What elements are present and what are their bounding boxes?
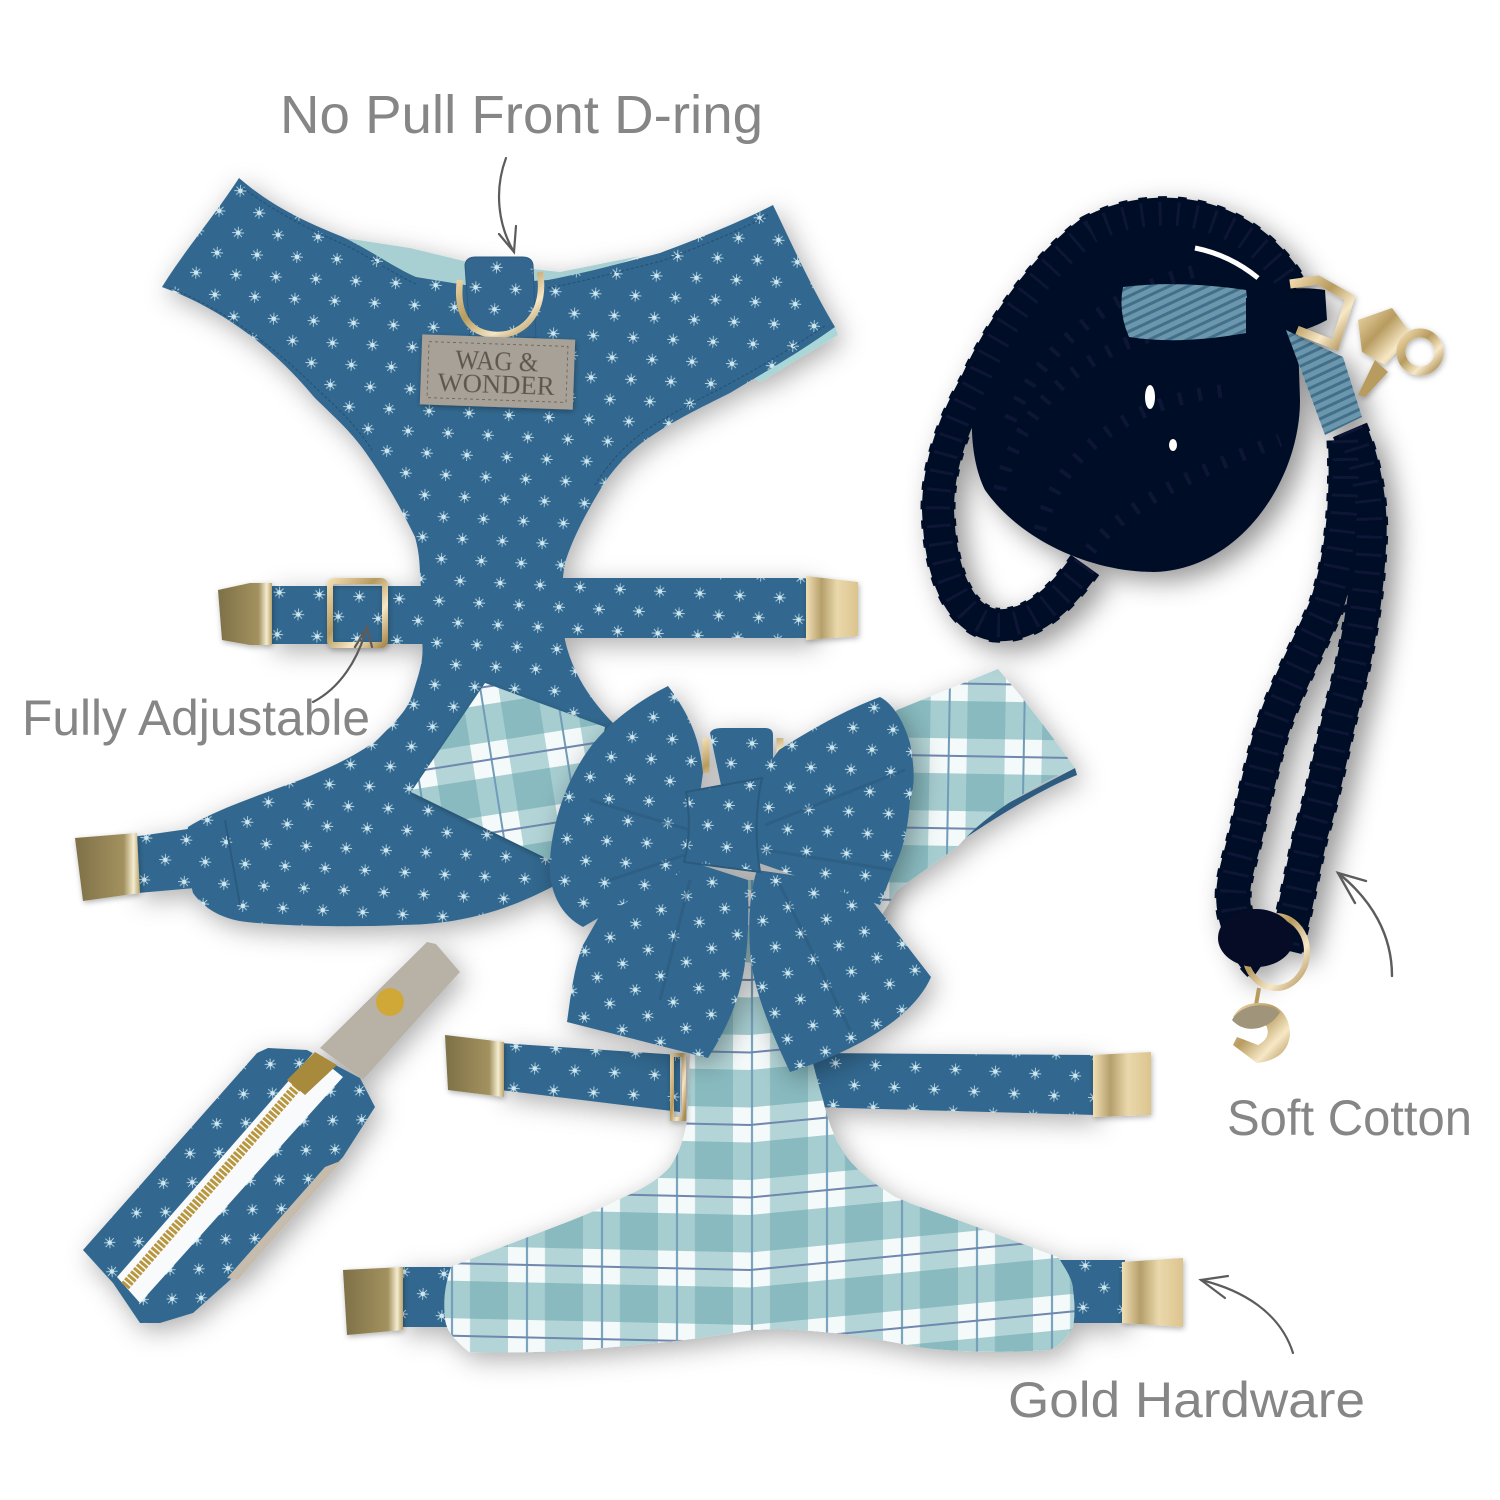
strap: lower middle left	[500, 1043, 680, 1112]
flap seam	[225, 820, 240, 905]
tail right	[749, 870, 931, 1072]
sailor bow	[550, 686, 931, 1072]
buckles, top harness	[75, 576, 858, 901]
buckles, lower harness	[343, 1035, 1183, 1335]
stitching on harness body	[170, 188, 825, 485]
trigger	[1358, 360, 1388, 397]
label: no pull front d-ring: No Pull Front D-ring	[280, 85, 763, 145]
lead strand right bumps	[1285, 430, 1370, 950]
strap: top left	[270, 586, 425, 644]
gap in coil	[1195, 248, 1258, 278]
o-ring	[1245, 916, 1307, 988]
lower plaid body	[444, 880, 1074, 1353]
label: gold hardware: Gold Hardware	[1008, 1372, 1365, 1428]
strap: lower left	[132, 828, 195, 893]
arrow: to rope	[1338, 873, 1392, 976]
thread wrap upper	[1121, 284, 1248, 340]
buckle: top left	[218, 583, 272, 645]
brand label: WONDER	[437, 368, 556, 401]
plaid wing right	[815, 669, 1075, 950]
arrow: to slider	[313, 627, 372, 702]
waste bag pouch	[83, 942, 460, 1323]
rope end	[1246, 288, 1327, 336]
plaid wing: left pocket	[411, 683, 605, 860]
pouch body	[83, 1048, 375, 1323]
harness body	[162, 178, 835, 926]
bow folds	[590, 770, 905, 1030]
thread wrap lower	[1286, 330, 1362, 435]
charm lens	[1232, 1005, 1280, 1029]
outer loop bumps	[938, 214, 1290, 625]
lining at right corner	[750, 327, 838, 382]
tail left	[567, 860, 748, 1058]
buckle: bottom left	[343, 1267, 403, 1335]
brand label	[420, 334, 575, 410]
strap: bottom right	[1055, 1260, 1125, 1323]
buckle: lower middle left	[445, 1035, 504, 1097]
top loop	[710, 728, 773, 790]
buckle: lower left	[75, 833, 140, 901]
lead strand right	[1285, 430, 1370, 950]
strap: lower middle right	[810, 1053, 1095, 1115]
webbing tab	[465, 257, 536, 338]
slider, lower	[672, 1055, 684, 1119]
back ring	[706, 738, 780, 773]
coiled rope mass	[972, 205, 1300, 572]
buckle: lower middle right	[1093, 1052, 1151, 1117]
zipper slider	[287, 1052, 337, 1095]
lead twist left	[1233, 440, 1346, 965]
wing right	[750, 697, 914, 905]
strap: bottom left	[400, 1267, 460, 1327]
leash ring and charm	[1218, 909, 1307, 1063]
plaid right half	[750, 978, 1074, 1352]
hook body	[1358, 308, 1412, 365]
slider	[330, 581, 385, 645]
arrow: to d-ring	[499, 158, 516, 252]
charm	[1233, 1003, 1290, 1063]
zipper tape	[117, 1053, 343, 1303]
buckle: bottom right	[1122, 1258, 1183, 1327]
harness: star print, front view	[132, 178, 838, 926]
strap: top right	[555, 578, 813, 638]
harness: plaid reverse, lower	[400, 669, 1125, 1353]
pouch label	[227, 1160, 343, 1280]
lead strand left	[1233, 440, 1346, 965]
rope leash	[938, 205, 1370, 965]
outer loop twist	[938, 214, 1290, 625]
zipper teeth	[125, 1083, 300, 1286]
brand label: WAG &	[455, 345, 539, 377]
lead strand left bumps	[1233, 440, 1346, 965]
arrow: to buckle	[1201, 1276, 1293, 1353]
hook loop	[1401, 333, 1439, 371]
swivel eye	[1290, 280, 1350, 345]
buckle: top right	[806, 576, 858, 640]
label: fully adjustable: Fully Adjustable	[22, 690, 370, 746]
holes in coil	[1145, 385, 1155, 409]
plaid left half	[444, 880, 1074, 1353]
d-ring	[459, 272, 541, 335]
snap	[376, 988, 404, 1016]
label: soft cotton: Soft Cotton	[1227, 1090, 1472, 1146]
leather tab	[320, 942, 460, 1080]
coil twist lines	[1000, 270, 1280, 550]
hole small	[1169, 439, 1177, 451]
wing left	[550, 686, 703, 927]
rope end knot	[1218, 909, 1294, 967]
lead twist	[1285, 430, 1370, 950]
gold snap hook	[1290, 280, 1439, 397]
lining at neck	[345, 238, 640, 290]
charm link	[1256, 988, 1259, 1005]
d-ring and webbing	[459, 257, 541, 338]
blue lining sliver right	[957, 768, 1077, 838]
knot	[684, 778, 762, 872]
outer loop	[938, 214, 1290, 625]
